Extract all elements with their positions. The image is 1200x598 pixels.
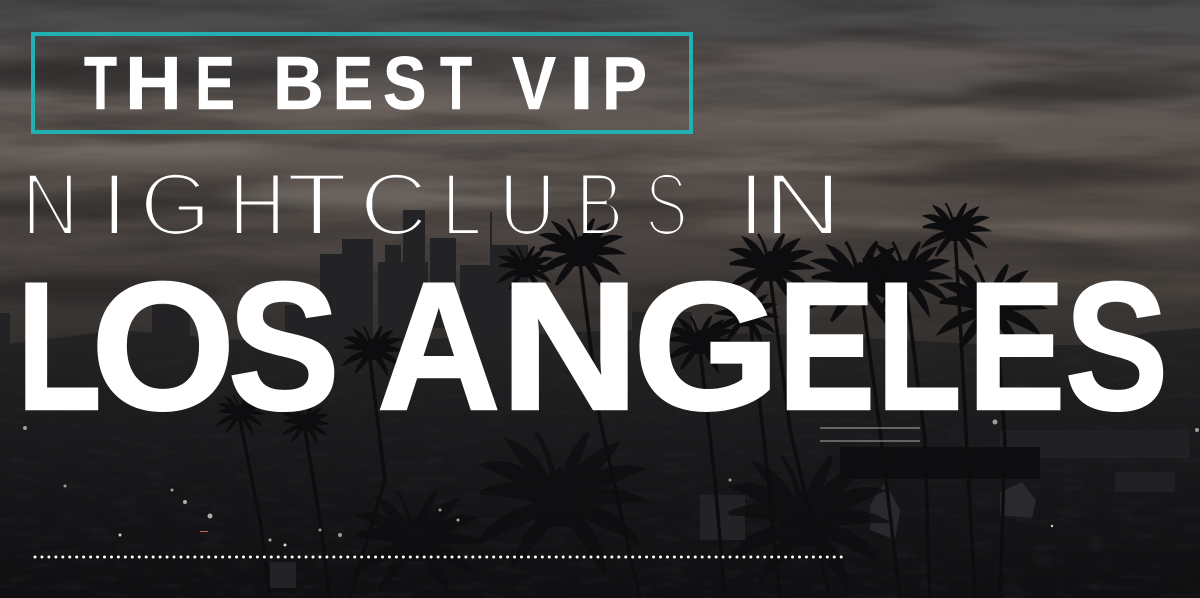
houses: [270, 430, 1190, 588]
heading: NIGHTCLUBS IN: H: [228, 154, 285, 254]
heading: LOS ANGELES: L: [877, 244, 962, 448]
heading: LOS ANGELES: S: [228, 244, 340, 448]
heading: THE BEST VIP: T: [440, 40, 472, 124]
sky: [0, 0, 1200, 400]
cloud streak texture: [0, 0, 1200, 350]
heading: NIGHTCLUBS IN: I: [102, 154, 127, 254]
heading: LOS ANGELES: S: [1065, 244, 1168, 448]
heading: NIGHTCLUBS IN: U: [498, 154, 555, 254]
palm trees: [218, 203, 1042, 598]
heading: NIGHTCLUBS IN: S: [645, 154, 688, 254]
clouds: [0, 46, 1200, 305]
heading: LOS ANGELES: E: [778, 244, 875, 448]
heading: THE BEST VIP: E: [333, 40, 373, 124]
heading: LOS ANGELES: N: [500, 244, 639, 448]
heading: NIGHTCLUBS IN: L: [442, 154, 482, 254]
heading: NIGHTCLUBS IN: C: [360, 154, 428, 254]
heading: NIGHTCLUBS IN: N: [764, 154, 841, 254]
heading: LOS ANGELES: G: [633, 244, 780, 448]
heading: THE BEST VIP: H: [125, 40, 182, 124]
heading: NIGHTCLUBS IN: N: [22, 154, 78, 254]
hills and city: [0, 328, 1200, 598]
city texture: [0, 345, 1200, 598]
heading: NIGHTCLUBS IN: I: [739, 154, 764, 254]
heading: THE BEST VIP: E: [195, 40, 235, 124]
heading: LOS ANGELES: A: [377, 244, 501, 448]
heading: THE BEST VIP: T: [84, 40, 117, 124]
heading: NIGHTCLUBS IN: B: [576, 154, 623, 254]
dotted divider: [34, 556, 843, 558]
heading: LOS ANGELES: L: [17, 244, 102, 448]
heading: THE BEST VIP: B: [273, 40, 324, 124]
heading: NIGHTCLUBS IN: G: [140, 154, 210, 254]
heading: THE BEST VIP: V: [512, 40, 556, 124]
heading: LOS ANGELES: O: [91, 244, 235, 448]
heading: THE BEST VIP: S: [383, 40, 427, 124]
heading: THE BEST VIP: P: [602, 40, 647, 124]
skyline: [0, 210, 692, 373]
heading: THE BEST VIP: I: [569, 40, 594, 124]
teal outlined title box: [31, 32, 693, 134]
heading: LOS ANGELES: E: [968, 244, 1065, 448]
heading: NIGHTCLUBS IN: T: [286, 154, 346, 254]
city lights: [23, 420, 1199, 546]
